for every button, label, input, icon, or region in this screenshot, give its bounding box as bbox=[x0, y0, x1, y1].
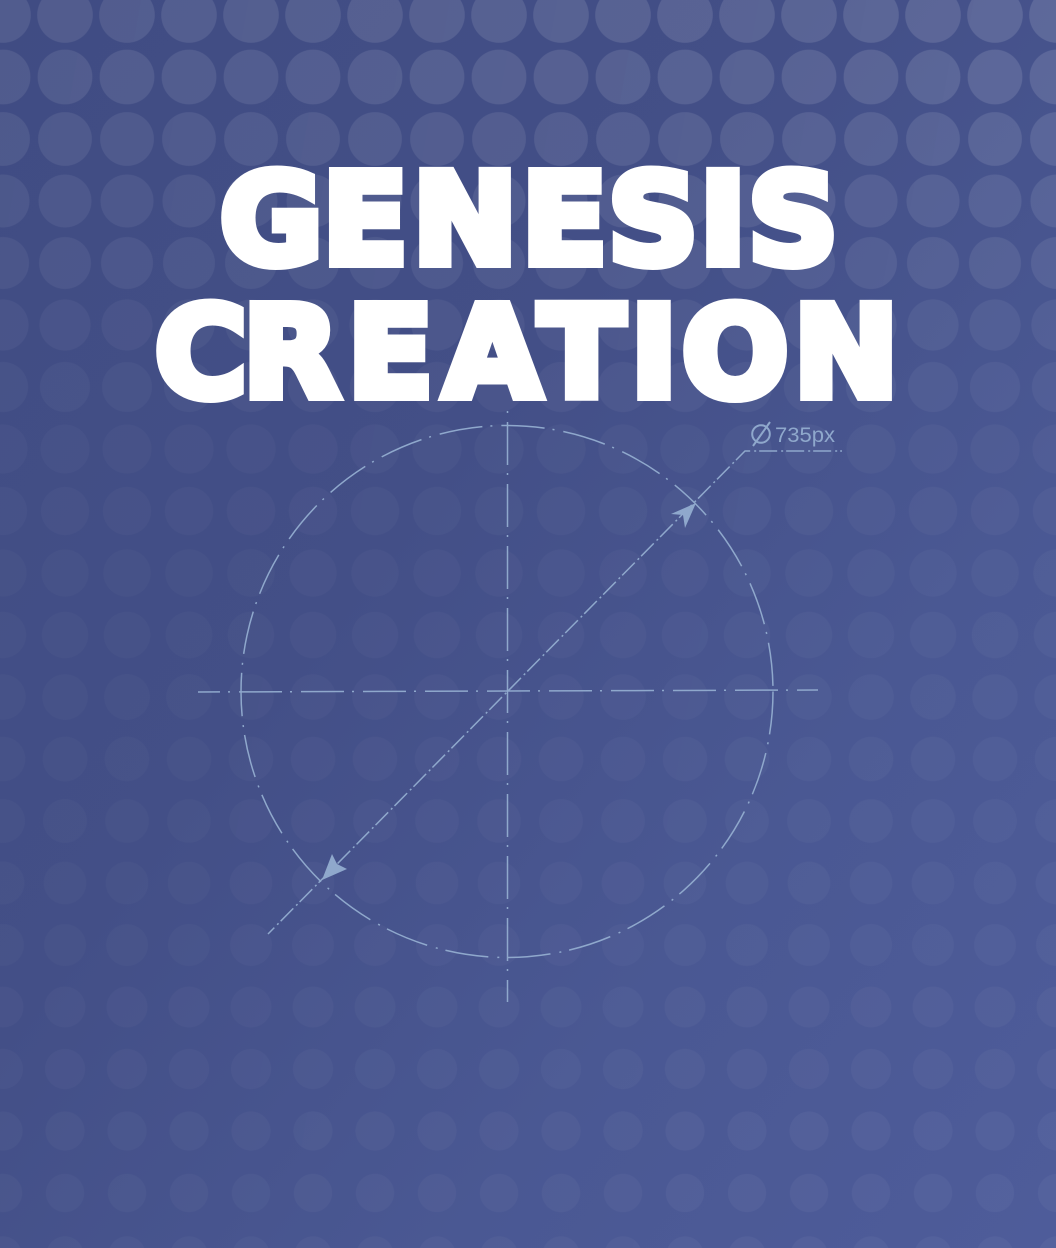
arrowhead: upper bbox=[671, 503, 696, 528]
title line 2: CREATION bbox=[155, 281, 898, 426]
diameter leader line bbox=[268, 451, 842, 934]
title line 1: GENESIS bbox=[220, 148, 838, 293]
technical diagram: circle with diameter dimension bbox=[198, 405, 842, 1002]
diameter label bbox=[752, 422, 836, 447]
title bbox=[155, 148, 898, 426]
dash-dot circle bbox=[241, 426, 773, 958]
label: 735px: 735px bbox=[775, 424, 836, 447]
horizontal centre line bbox=[198, 690, 818, 692]
icon: diameter symbol bbox=[752, 422, 770, 446]
vertical centre line bbox=[506, 405, 508, 1002]
arrowhead: lower bbox=[322, 854, 347, 880]
